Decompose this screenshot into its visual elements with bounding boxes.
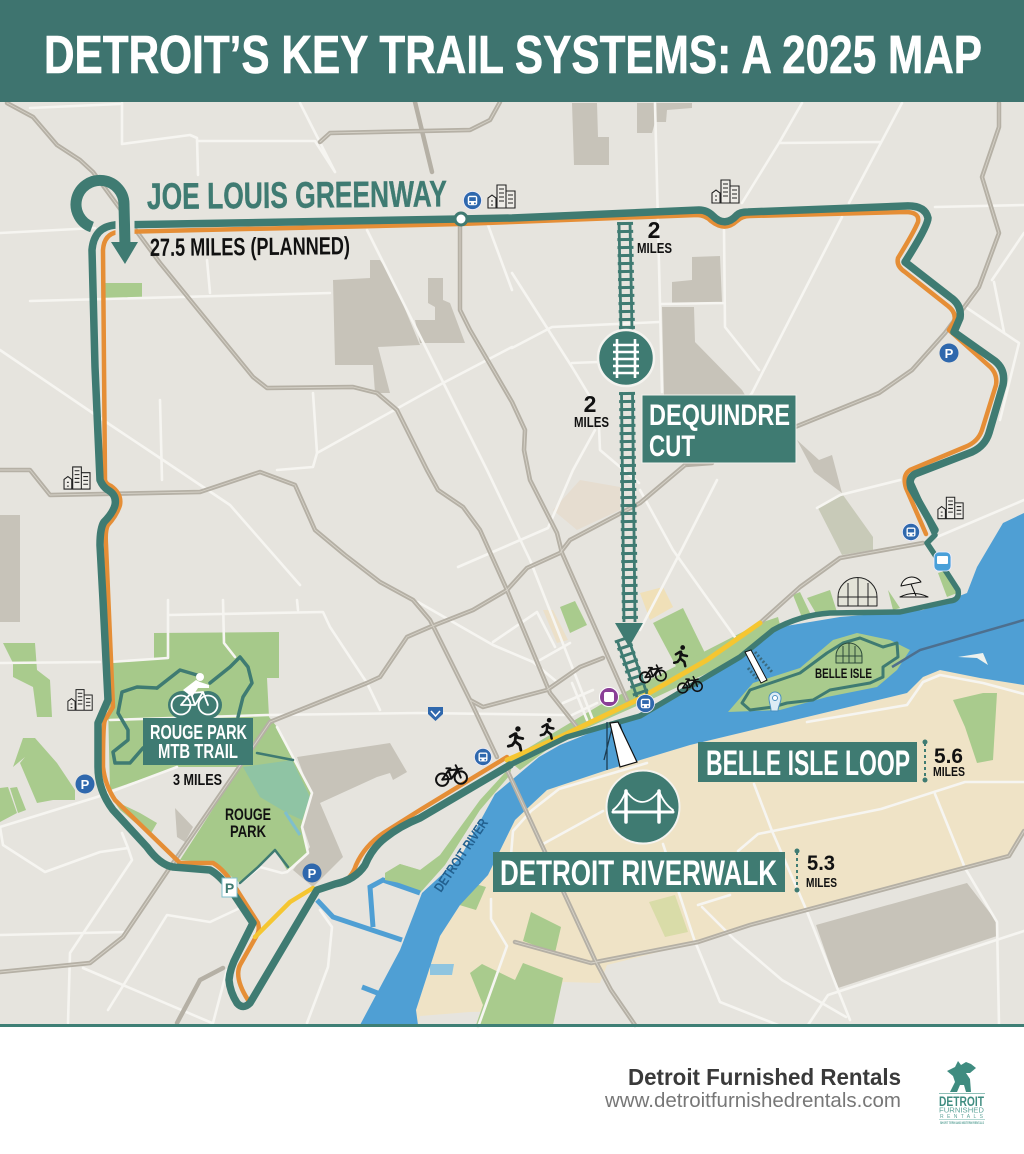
icon: buildings greenway — [488, 185, 515, 208]
label: 2 miles north: MILES — [637, 240, 672, 257]
riverfront teal line — [510, 480, 958, 765]
belle isle trail — [742, 638, 898, 710]
label: 2 miles south — [574, 391, 609, 431]
logo: DETROIT — [939, 1094, 985, 1109]
greenway teal west line — [92, 225, 510, 1006]
label: greenway length: 27.5 MILES (PLANNED) — [150, 232, 350, 262]
bridge circle icon — [606, 770, 680, 844]
highways — [0, 102, 1024, 1025]
label: rouge park: PARK — [230, 822, 267, 841]
dequindre rail line — [617, 222, 647, 697]
icon: belle isle pin — [769, 692, 781, 711]
icon: buildings north — [712, 180, 739, 203]
icon: beach umbrella — [900, 577, 928, 597]
icon: parking south: P — [308, 866, 317, 881]
icon: runner 1 — [508, 726, 523, 750]
rouge park mtb label: MTB TRAIL — [158, 741, 238, 763]
label: belle isle: BELLE ISLE — [815, 665, 872, 681]
land base — [0, 102, 1024, 1025]
orange riverwalk west — [316, 757, 507, 890]
line to east over river — [892, 620, 1024, 667]
arrow gap — [116, 216, 134, 236]
rail circle icon — [598, 330, 654, 386]
icon: buildings east — [938, 497, 963, 519]
rouge park mtb trail — [113, 657, 293, 883]
label: rouge park: ROUGE — [225, 805, 271, 824]
icon: transit purple — [600, 688, 618, 706]
node on greenway — [455, 213, 467, 225]
icon: bus east — [902, 523, 920, 541]
label: 3 miles: 3 MILES — [173, 772, 222, 789]
cyclist backing — [168, 691, 222, 719]
greenway teal line — [115, 206, 1004, 530]
river sliver island — [958, 653, 988, 665]
label: joe louis greenway: JOE LOUIS GREENWAY — [147, 173, 447, 217]
icon: buildings rouge — [68, 690, 92, 710]
parks — [0, 283, 997, 1025]
icon: bike downtown — [640, 665, 666, 683]
belle isle loop label: BELLE ISLE LOOP — [706, 744, 910, 783]
icon: parking east — [940, 344, 958, 362]
title band — [0, 0, 1024, 102]
label: 2 miles north: 2 — [648, 217, 660, 243]
icon: parking east: P — [945, 346, 954, 361]
orange west and south — [103, 232, 259, 1000]
icon: accessibility circle — [474, 748, 492, 766]
belle isle loop label — [698, 742, 917, 783]
label: detroit river: DETROIT RIVER — [431, 816, 491, 895]
faint downtown patches — [553, 480, 620, 530]
icon: parking west — [76, 774, 94, 794]
footer url: www.detroitfurnishedrentals.com — [604, 1090, 901, 1112]
riverwalk yellow — [507, 623, 760, 760]
joe louis greenway trail — [92, 206, 1004, 1006]
riverwalk miles: 5.3 — [807, 852, 835, 875]
rouge park pond — [243, 760, 310, 820]
icon: trail marker — [222, 878, 237, 897]
small pond — [430, 964, 454, 975]
icon: parking west: P — [81, 777, 90, 792]
icon: conservatory — [838, 578, 877, 606]
ambassador bridge graphic — [604, 722, 637, 770]
icon: parking south — [302, 864, 322, 882]
label: rouge park — [225, 805, 271, 841]
logo: RENTALS — [940, 1114, 984, 1120]
label: 2 miles north — [637, 217, 672, 257]
logo: SHORT TERM AND MIDTERM RENTALS — [940, 1121, 984, 1125]
icon: transit east — [934, 552, 951, 571]
belle isle miles: 5.6 — [934, 745, 963, 768]
logo: FURNISHED — [939, 1108, 984, 1114]
icon: bus at greenway — [463, 191, 482, 210]
icon: runner 3 — [674, 645, 687, 666]
canada light park — [649, 895, 688, 937]
dequindre label — [642, 395, 796, 463]
riverwalk miles — [794, 848, 837, 892]
label: 2 miles south: MILES — [574, 414, 609, 431]
rail arrowhead — [615, 623, 643, 647]
grey building blocks — [0, 103, 997, 988]
riverwalk miles: MILES — [806, 875, 837, 890]
detroit riverwalk label: DETROIT RIVERWALK — [500, 854, 777, 893]
label: 2 miles south: 2 — [584, 391, 596, 417]
canals — [317, 880, 420, 994]
belle isle miles: MILES — [933, 764, 965, 779]
logo — [939, 1061, 985, 1125]
icon: bike riverfront — [678, 677, 702, 693]
top arrow: greenway loop — [76, 180, 138, 264]
canadian shore land — [416, 670, 1024, 1025]
icon: bike riverwalk west — [436, 765, 467, 786]
icon: belle isle conservatory — [836, 643, 862, 663]
detroit river — [360, 513, 1024, 1025]
rouge park mtb label: ROUGE PARK — [150, 722, 247, 744]
dequindre label: DEQUINDRE — [649, 399, 790, 432]
rouge park mtb label — [143, 718, 253, 765]
bridge to belle isle — [745, 650, 772, 683]
footer rule — [0, 1024, 1024, 1027]
rouge park — [107, 632, 312, 883]
icon: trail marker: P — [225, 880, 234, 896]
icon: runner 2 — [541, 718, 553, 738]
footer company name: Detroit Furnished Rentals — [628, 1064, 901, 1090]
icon: cyclist — [172, 673, 218, 714]
belle isle land — [728, 633, 910, 712]
icon: interstate shield — [428, 707, 443, 721]
orange north and east — [118, 212, 996, 534]
icon: bus riverfront — [636, 694, 655, 713]
dequindre label: CUT — [649, 430, 695, 463]
belle isle miles — [922, 740, 965, 782]
icon: buildings west — [64, 467, 90, 489]
